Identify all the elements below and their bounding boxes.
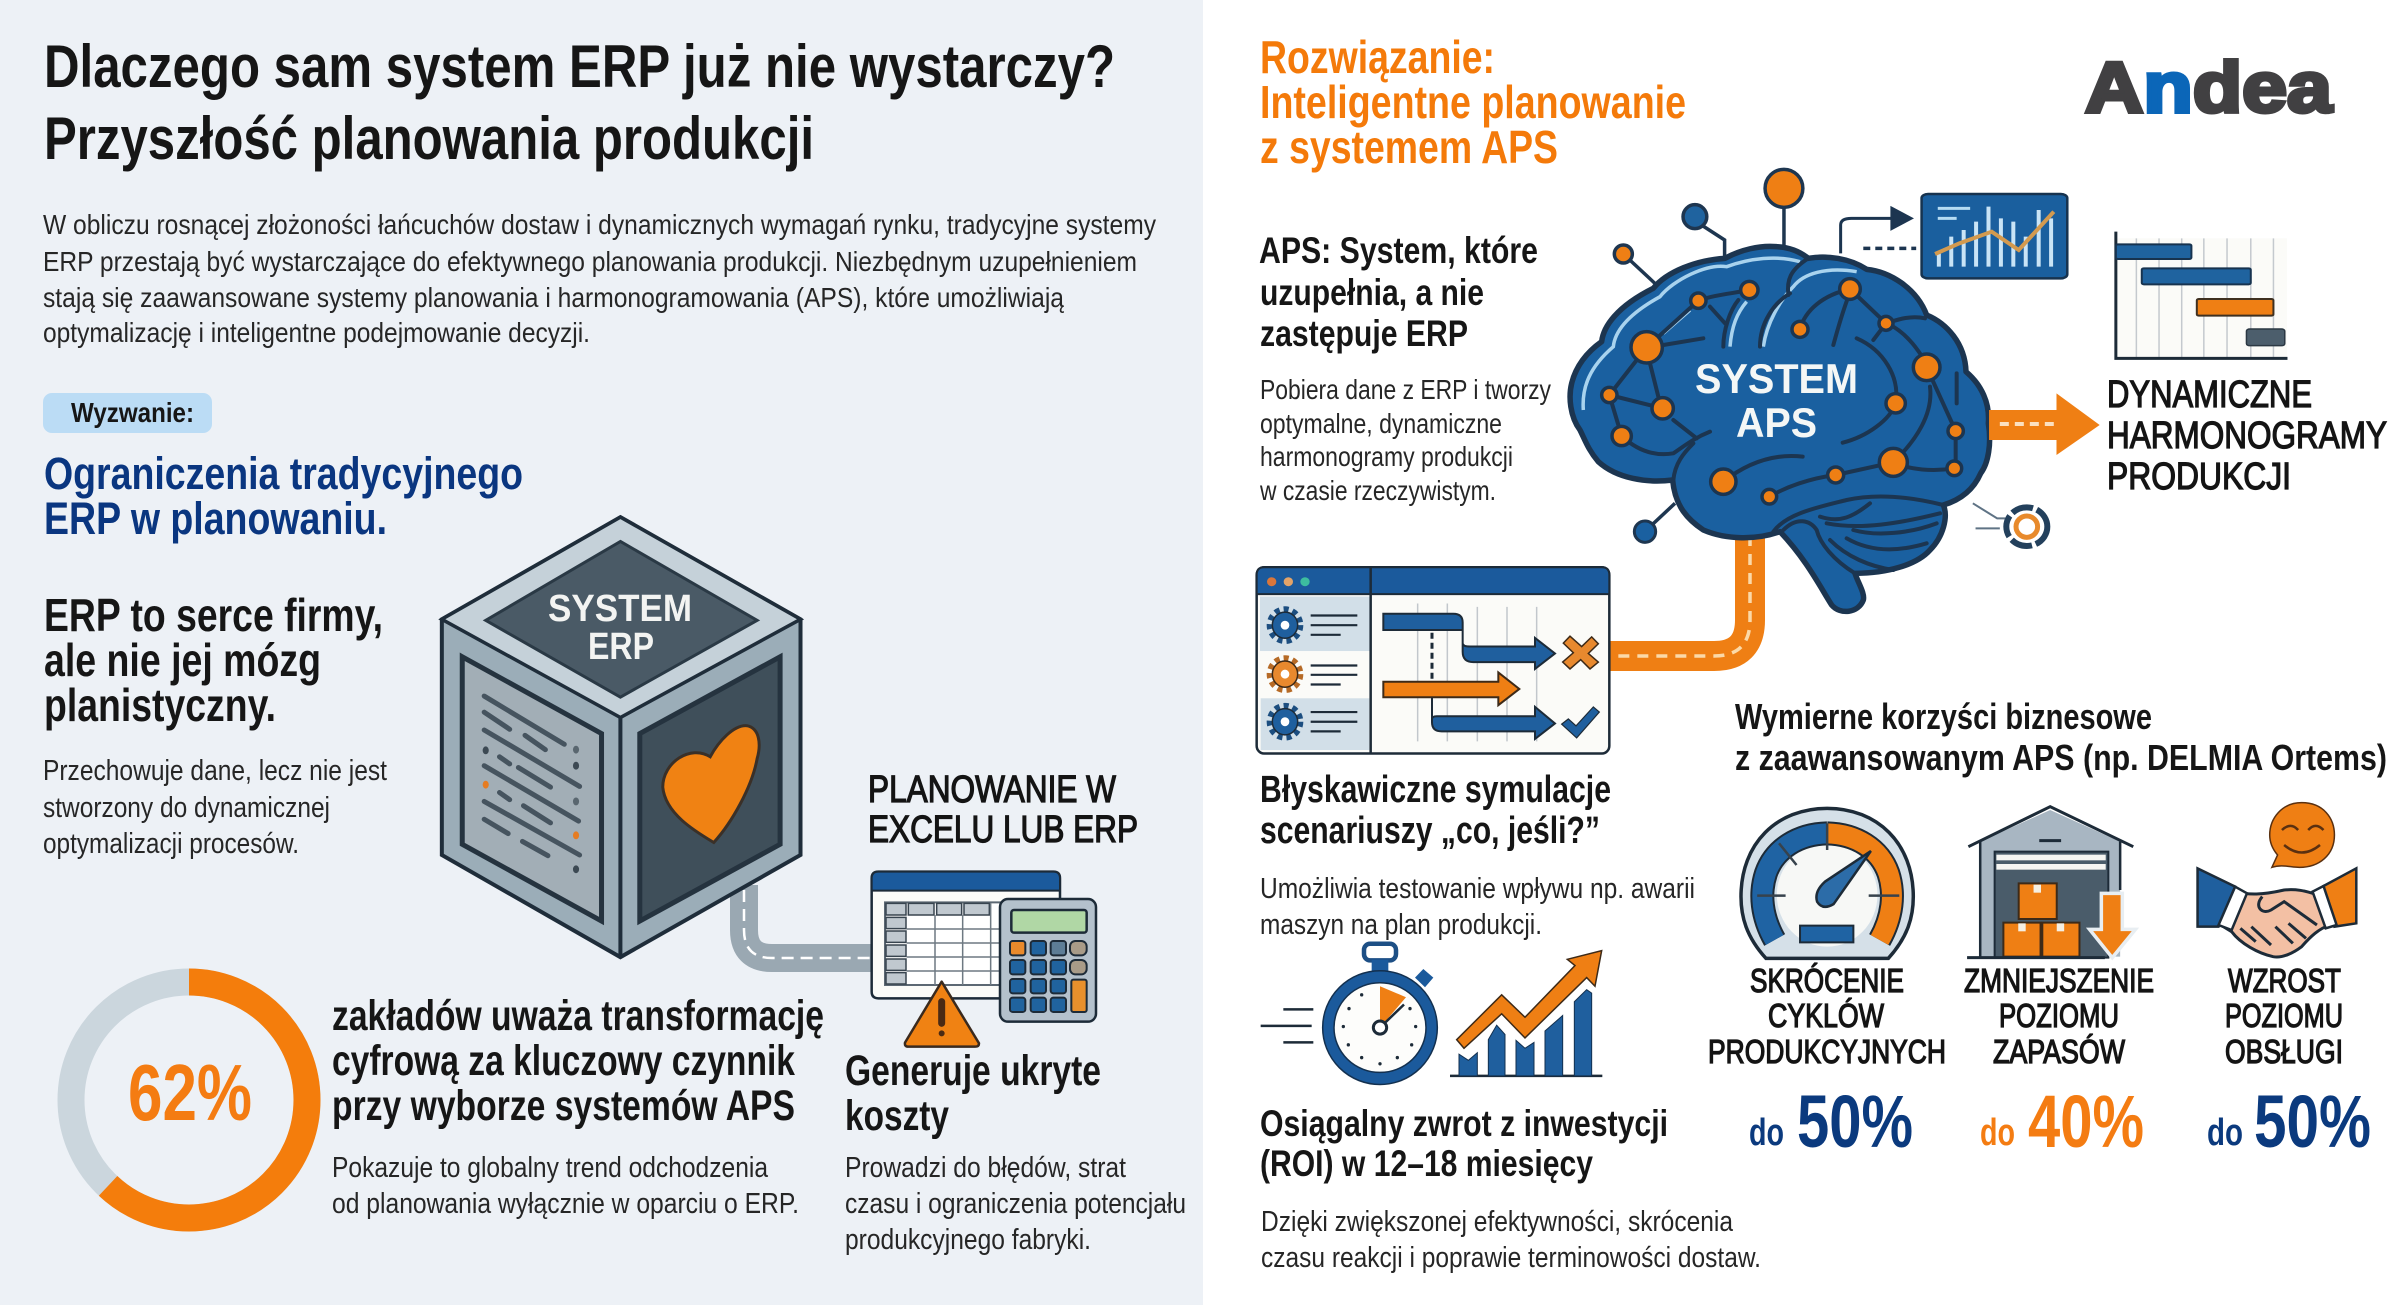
ERP heart heading: planistyczny. bbox=[44, 679, 276, 731]
ROI description bbox=[1261, 1206, 1761, 1274]
brain body bbox=[1570, 245, 1990, 611]
section heading: Ograniczenia tradycyjnego bbox=[44, 448, 523, 499]
hidden costs description: Prowadzi do błędów, strat bbox=[845, 1152, 1126, 1184]
ROI description: czasu reakcji i poprawie terminowości dostaw. bbox=[1261, 1242, 1761, 1274]
cube label bbox=[548, 588, 692, 668]
icon: stopwatch bbox=[1261, 944, 1437, 1084]
benefits heading: Wymierne korzyści biznesowe bbox=[1735, 696, 2152, 737]
road from ERP to spreadsheet bbox=[744, 885, 872, 958]
hidden costs heading: koszty bbox=[845, 1092, 949, 1140]
solution heading: Inteligentne planowanie bbox=[1260, 76, 1686, 128]
ROI heading: Osiągalny zwrot z inwestycji bbox=[1260, 1103, 1668, 1144]
hidden costs description: czasu i ograniczenia potencjału bbox=[845, 1188, 1186, 1220]
intro paragraph: optymalizację i inteligentne podejmowanie decyzji. bbox=[43, 317, 590, 348]
benefit 1 value: 50% bbox=[1797, 1080, 1913, 1163]
cube label: SYSTEM bbox=[548, 588, 692, 630]
icon: heart bbox=[663, 726, 759, 842]
title: Dlaczego sam system ERP już nie wystarczy? bbox=[44, 33, 1115, 100]
intro paragraph: ERP przestają być wystarczające do efektywnego planowania produkcji. Niezbędnym uzupełnieniem bbox=[43, 246, 1137, 277]
tag: Wyzwanie bbox=[43, 393, 212, 433]
panel: right solution bbox=[1203, 0, 2406, 1305]
benefit 1 label bbox=[1708, 962, 1946, 1070]
benefit 2 value: 40% bbox=[2028, 1080, 2144, 1163]
hidden costs description: produkcyjnego fabryki. bbox=[845, 1224, 1091, 1256]
intro paragraph bbox=[43, 209, 1156, 348]
APS description: w czasie rzeczywistym. bbox=[1259, 475, 1496, 506]
stat: donut 62%: 62% bbox=[128, 1048, 252, 1137]
benefit icons bbox=[1741, 803, 2356, 958]
Excel heading bbox=[868, 769, 1138, 851]
solution heading: Rozwiązanie: bbox=[1260, 31, 1495, 83]
ERP description: Przechowuje dane, lecz nie jest bbox=[43, 755, 387, 787]
APS heading bbox=[1259, 230, 1538, 354]
intro paragraph: stają się zaawansowane systemy planowania i harmonogramowania (APS), które umożliwiają bbox=[43, 282, 1064, 313]
stat description bbox=[332, 1152, 799, 1220]
icon: brain system APS bbox=[1570, 169, 2287, 611]
Excel heading: EXCELU LUB ERP bbox=[868, 809, 1138, 851]
ERP heart heading: ale nie jej mózg bbox=[44, 634, 321, 686]
simulation heading bbox=[1260, 769, 1611, 852]
benefit 1 value: do bbox=[1749, 1112, 1784, 1154]
simulation description: maszyn na plan produkcji. bbox=[1260, 909, 1542, 941]
solution heading: z systemem APS bbox=[1260, 121, 1558, 173]
icon: spreadsheet calculator warning bbox=[872, 872, 1096, 1047]
stat description: Pokazuje to globalny trend odchodzenia bbox=[332, 1152, 769, 1184]
icon: gauge bbox=[1741, 808, 1913, 958]
ROI heading bbox=[1260, 1103, 1668, 1184]
benefit 3 label: POZIOMU bbox=[2225, 997, 2343, 1034]
ERP description: optymalizacji procesów. bbox=[43, 828, 299, 860]
stat heading: przy wyborze systemów APS bbox=[332, 1082, 795, 1130]
icon: report arrow bbox=[1841, 208, 1916, 253]
intro paragraph: W obliczu rosnącej złożoności łańcuchów dostaw i dynamicznych wymagań rynku, tradycyjne systemy bbox=[43, 209, 1156, 240]
brain surroundings bbox=[1683, 169, 2287, 546]
benefit 2 label: ZMNIEJSZENIE bbox=[1964, 962, 2154, 999]
APS description: Pobiera dane z ERP i tworzy bbox=[1260, 374, 1551, 405]
APS heading: APS: System, które bbox=[1259, 230, 1538, 271]
APS heading: uzupełnia, a nie bbox=[1260, 272, 1484, 313]
APS heading: zastępuje ERP bbox=[1260, 313, 1468, 354]
brain label bbox=[1695, 355, 1858, 446]
ERP heart heading bbox=[44, 589, 383, 731]
icon: growth chart bbox=[1450, 951, 1602, 1076]
schedules heading: PRODUKCJI bbox=[2107, 456, 2291, 498]
hidden costs description bbox=[845, 1152, 1186, 1256]
benefit 2 label: ZAPASÓW bbox=[1993, 1033, 2126, 1070]
arrow: to schedules bbox=[1989, 393, 2100, 455]
stat heading: zakładów uważa transformację bbox=[332, 992, 824, 1040]
benefit 3 value bbox=[2207, 1080, 2371, 1163]
benefit 1 value bbox=[1749, 1080, 1913, 1163]
hidden costs heading: Generuje ukryte bbox=[845, 1047, 1101, 1095]
benefit 2 value bbox=[1980, 1080, 2144, 1163]
benefit 1 label: SKRÓCENIE bbox=[1750, 962, 1904, 999]
schedules heading bbox=[2107, 374, 2387, 498]
stat description: od planowania wyłącznie w oparciu o ERP. bbox=[332, 1188, 799, 1220]
APS description: harmonogramy produkcji bbox=[1260, 441, 1513, 472]
ERP description bbox=[43, 755, 387, 860]
stat heading bbox=[332, 992, 824, 1130]
benefit 3 label: OBSŁUGI bbox=[2225, 1033, 2343, 1070]
ERP description: stworzony do dynamicznej bbox=[43, 792, 330, 824]
ROI description: Dzięki zwiększonej efektywności, skrócenia bbox=[1261, 1206, 1734, 1238]
cube label: ERP bbox=[588, 626, 654, 668]
simulation description bbox=[1260, 873, 1695, 941]
schedules heading: DYNAMICZNE bbox=[2107, 374, 2312, 416]
brain label: APS bbox=[1736, 399, 1817, 446]
benefit 3 label: WZROST bbox=[2228, 962, 2341, 999]
benefits heading bbox=[1735, 696, 2387, 778]
benefit 3 value: 50% bbox=[2254, 1080, 2371, 1163]
stat: donut 62% bbox=[71, 982, 307, 1218]
ERP heart heading: ERP to serce firmy, bbox=[44, 589, 383, 641]
title: Przyszłość planowania produkcji bbox=[44, 105, 814, 172]
panel: left challenge bbox=[0, 0, 1203, 1305]
icon: dashboard chart bbox=[1922, 194, 2067, 278]
simulation description: Umożliwia testowanie wpływu np. awarii bbox=[1260, 873, 1695, 905]
icon: Gantt chart bbox=[2116, 232, 2287, 358]
benefit 2 label bbox=[1964, 962, 2154, 1070]
icon: small gear bbox=[1973, 503, 2047, 546]
simulation heading: scenariuszy „co, jeśli?” bbox=[1260, 810, 1600, 852]
icon: handshake with smile bubble bbox=[2198, 803, 2356, 957]
benefit 2 label: POZIOMU bbox=[1999, 997, 2119, 1034]
icon: warehouse bbox=[1967, 807, 2135, 958]
connector road from simulation to brain bbox=[1608, 510, 1750, 656]
hidden costs heading bbox=[845, 1047, 1101, 1140]
benefit 1 label: CYKLÓW bbox=[1768, 997, 1885, 1034]
benefit 3 label bbox=[2225, 962, 2343, 1070]
icon: simulation window and stopwatch and growth chart bbox=[1257, 567, 1609, 1084]
Excel heading: PLANOWANIE W bbox=[868, 769, 1116, 811]
icon: ERP cube bbox=[442, 517, 801, 957]
logo: Andea: Andea bbox=[2085, 49, 2333, 128]
APS description bbox=[1259, 374, 1551, 506]
simulation heading: Błyskawiczne symulacje bbox=[1260, 769, 1611, 811]
stat heading: cyfrową za kluczowy czynnik bbox=[332, 1037, 795, 1085]
section heading: ERP w planowaniu. bbox=[44, 493, 387, 544]
benefit 1 label: PRODUKCYJNYCH bbox=[1708, 1033, 1946, 1070]
title bbox=[44, 33, 1115, 172]
solution heading bbox=[1260, 31, 1686, 173]
section heading bbox=[44, 448, 523, 544]
benefit 2 value: do bbox=[1980, 1112, 2015, 1154]
benefit 3 value: do bbox=[2207, 1112, 2243, 1154]
tag: Wyzwanie: Wyzwanie: bbox=[71, 397, 194, 428]
ROI heading: (ROI) w 12–18 miesięcy bbox=[1260, 1143, 1593, 1184]
brain label: SYSTEM bbox=[1695, 355, 1858, 402]
APS description: optymalne, dynamiczne bbox=[1260, 408, 1502, 439]
